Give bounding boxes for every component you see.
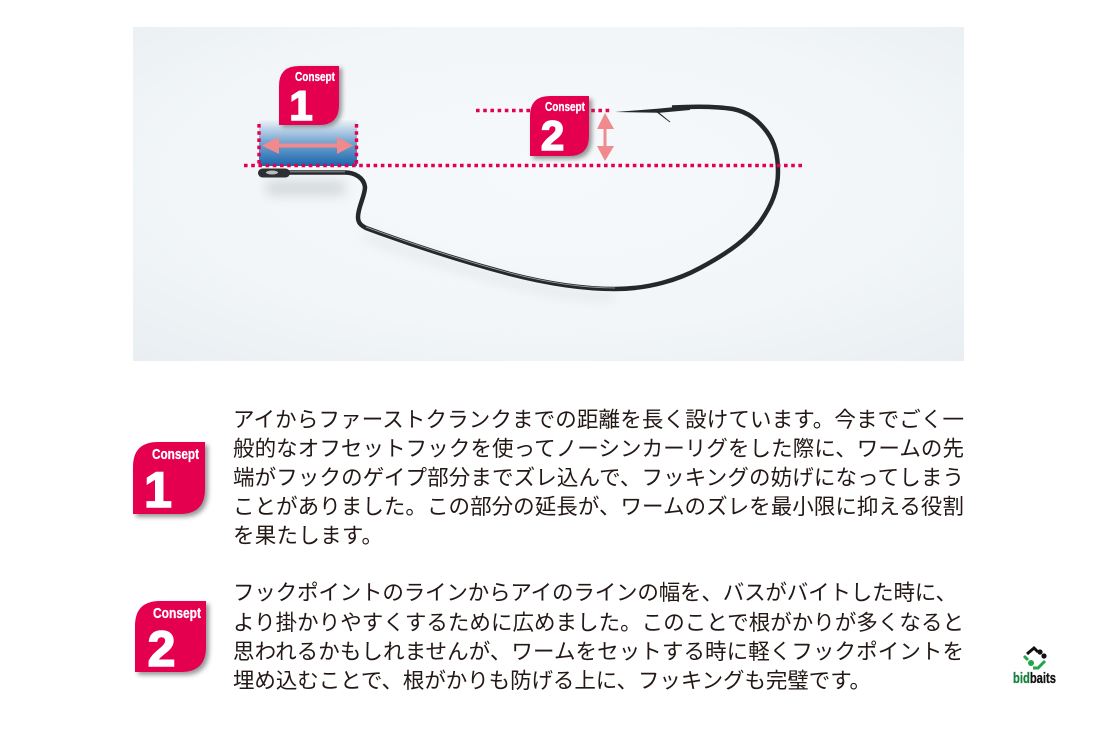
badge: Consept 2 [135, 601, 209, 677]
dotted line: eye line [244, 164, 802, 167]
text block: Consept 1 description [233, 408, 964, 548]
dotted line: gauge right [355, 124, 358, 165]
text block: Consept 1 description: アイからファーストクランクまでの距離を長く設けています。今までごく一 [233, 408, 964, 432]
text block: Consept 1 description: 端がフックのゲイプ部分までズレ込んで、フッキングの妨げになってしまう [233, 466, 964, 490]
logo: bidbaits: bidbaits [1013, 670, 1056, 687]
badge: Consept 2: 2 [148, 621, 175, 677]
badge: Consept 1 small: 1 [289, 82, 313, 129]
badge: Consept 1 small [279, 66, 342, 129]
badge: Consept 2 small: 2 [541, 112, 564, 159]
text block: Consept 1 description: 般的なオフセットフックを使ってノーシンカーリグをした際に、ワームの先 [233, 437, 964, 461]
text block: Consept 2 description: 思われるかもしれませんが、ワームをセットする時に軽くフックポイントを [233, 640, 964, 664]
text block: Consept 2 description: 埋め込むことで、根がかりも防げる上に、フッキングも完璧です。 [233, 669, 871, 693]
dotted line: point line [476, 109, 612, 112]
text block: Consept 2 description: フックポイントのラインからアイのラインの幅を、バスがバイトした時に、 [233, 581, 957, 605]
badge: Consept 1 [133, 442, 208, 518]
arrow: height gap [597, 113, 614, 161]
badge: Consept 1: Consept [152, 446, 199, 463]
logo: bidbaits [1013, 648, 1056, 687]
panel: hook photo [133, 27, 964, 361]
badge: Consept 1 small: Consept [295, 69, 336, 84]
hook shadow [266, 188, 615, 297]
badge: Consept 1: 1 [144, 462, 172, 518]
text block: Consept 2 description: より掛かりやすくするために広めました。このことで根がかりが多くなると [233, 611, 964, 635]
badge: Consept 2: Consept [153, 605, 201, 622]
badge: Consept 2 small: Consept [545, 99, 586, 114]
text block: Consept 1 description: ことがありました。この部分の延長が、ワームのズレを最小限に抑える役割 [233, 495, 964, 519]
text block: Consept 2 description [233, 581, 964, 693]
badge: Consept 2 small [530, 96, 592, 159]
arrow: width of shank [262, 137, 353, 154]
text block: Consept 1 description: を果たします。 [233, 524, 383, 548]
dotted line: gauge left [257, 124, 261, 165]
icon: fishing hook [258, 106, 778, 289]
blue gauge band [259, 120, 357, 166]
